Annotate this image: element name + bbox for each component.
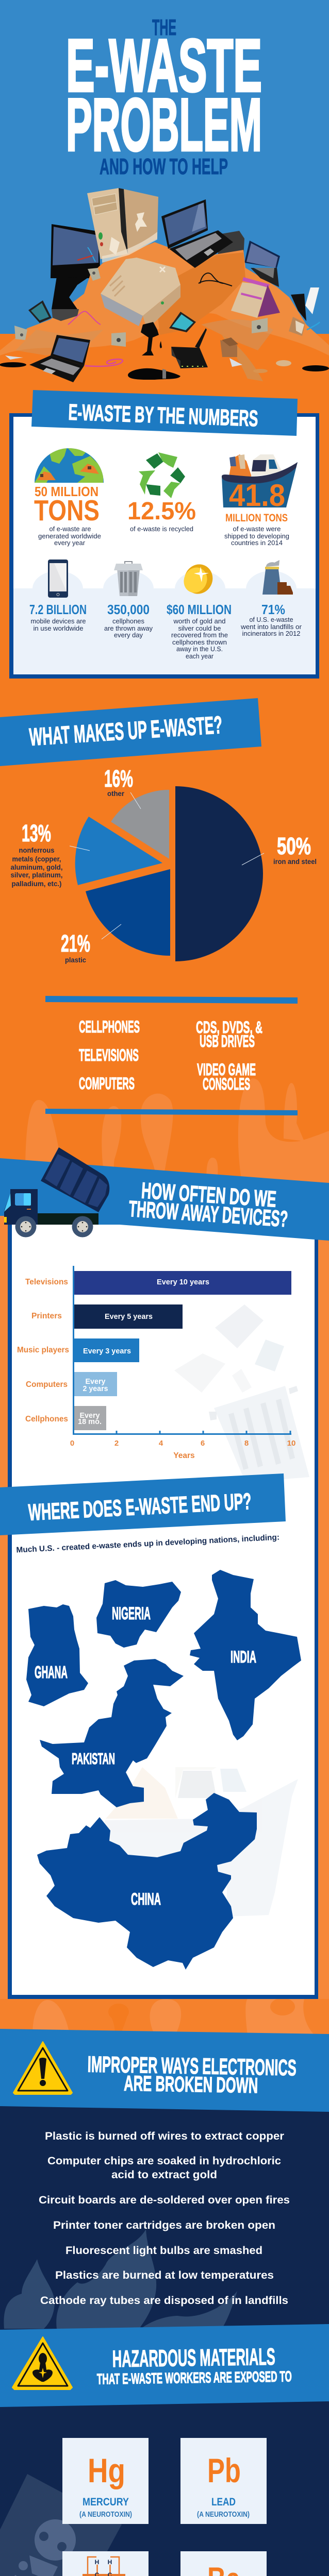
list: improper practices: Printer toner cartridges are broken open — [53, 2219, 275, 2231]
stat: 7.2 billion mobile devices: in use worldwide — [33, 624, 84, 632]
card: polyvinyl chloride — [62, 2551, 149, 2576]
card: mercury: (A NEUROTOXIN) — [79, 2510, 132, 2519]
axis labels — [70, 1439, 295, 1460]
map: china — [37, 1793, 257, 1970]
heading banner — [31, 390, 298, 436]
axis labels: 2 — [114, 1439, 119, 1448]
card: mercury: MERCURY — [83, 2496, 129, 2508]
list: improper practices: Circuit boards are de-soldered over open fires — [39, 2194, 290, 2206]
bar: computers: Computers — [26, 1380, 68, 1389]
title: AND HOW TO HELP — [100, 154, 228, 179]
map: ghana: GHANA — [35, 1663, 68, 1682]
stat: 350,000 cellphones: 350,000 — [107, 602, 150, 617]
label: nonferrous metals: aluminum, gold, — [10, 863, 63, 871]
axis labels: 0 — [70, 1439, 74, 1448]
bar: computers: Every — [86, 1377, 106, 1386]
icon: health hazard triangle — [12, 2337, 72, 2389]
label: nonferrous metals: silver, platinum, — [10, 871, 63, 879]
label: iron and steel: iron and steel — [273, 857, 317, 866]
stat: 41.8 million tons: of e-waste were — [233, 525, 281, 533]
stat: 350,000 cellphones — [104, 562, 153, 639]
label: plastic — [61, 930, 90, 964]
map: nigeria: NIGERIA — [112, 1604, 151, 1623]
heading: what makes up e-waste — [0, 698, 261, 766]
card: lead — [180, 2438, 267, 2524]
list: types of e-waste devices: CONSOLES — [203, 1075, 250, 1093]
list: types of e-waste devices: TELEVISIONS — [79, 1046, 139, 1064]
list: types of e-waste devices: VIDEO GAME — [197, 1060, 256, 1079]
bar: cellphones — [25, 1406, 106, 1430]
stat: 7.2 billion mobile devices: mobile devices are — [31, 617, 86, 625]
watermark: discarded devices — [174, 1304, 309, 1482]
stat: 12.5% recycled — [127, 452, 196, 533]
panel: hazardous materials — [0, 2324, 329, 2576]
bar: computers — [26, 1372, 117, 1396]
label: plastic: plastic — [65, 956, 86, 964]
subtitle: Much U.S. - created e-waste ends up in developing nations, including: — [16, 1533, 279, 1554]
stat: 350,000 cellphones: every day — [114, 631, 143, 639]
label: iron and steel — [273, 833, 317, 866]
card: lead: LEAD — [211, 2496, 236, 2508]
stat: 50 million tons: 50 MILLION — [35, 484, 98, 499]
list: improper practices — [39, 2130, 290, 2307]
list: types of e-waste devices: CDS, DVDS, & — [196, 1018, 262, 1037]
panel: device lifespan and destinations — [8, 1216, 318, 1999]
list: types of e-waste devices: COMPUTERS — [79, 1074, 135, 1093]
title: THE — [152, 15, 176, 40]
label: other: other — [107, 789, 125, 798]
stat: 350,000 cellphones: cellphones — [112, 617, 144, 625]
stat: 41.8 million tons: shipped to developing — [224, 532, 289, 540]
axis labels: 8 — [244, 1439, 249, 1448]
stat: 350,000 cellphones: are thrown away — [104, 624, 153, 632]
map: china: CHINA — [131, 1890, 161, 1908]
label: nonferrous metals: nonferrous — [19, 846, 55, 854]
card: polyvinyl chloride: H — [95, 2558, 99, 2566]
axis labels: 4 — [159, 1439, 163, 1448]
stat: $60 million of gold and silver: recovered from the — [171, 631, 228, 639]
label: nonferrous metals: palladium, etc.) — [11, 880, 62, 888]
list: improper practices: Cathode ray tubes are disposed of in landfills — [40, 2295, 288, 2307]
list: improper practices: Plastics are burned at low temperatures — [55, 2269, 274, 2281]
map: india: INDIA — [231, 1648, 256, 1666]
banner: how often do we throw away devices — [0, 1158, 329, 1241]
label: nonferrous metals: metals (copper, — [12, 855, 61, 863]
label: nonferrous metals: 13% — [22, 820, 51, 846]
stat: 12.5% recycled: of e-waste is recycled — [130, 525, 193, 533]
bar: music players — [17, 1338, 139, 1362]
icon: dump truck — [4, 1147, 109, 1238]
slice: iron and steel 50% — [175, 786, 263, 961]
stat: 41.8 million tons: countries in 2014 — [231, 539, 283, 547]
label: plastic: 21% — [61, 930, 90, 957]
bar: printers: Every 5 years — [105, 1312, 153, 1321]
bar: computers: 2 years — [83, 1384, 108, 1393]
stat: 50 million tons: of e-waste are — [50, 525, 91, 533]
list: improper practices: acid to extract gold — [111, 2169, 217, 2181]
card: mercury — [62, 2438, 149, 2524]
slice: plastic 21% — [86, 869, 170, 956]
banner: hazardous materials — [0, 2324, 329, 2407]
panel: e-waste by the numbers — [9, 390, 319, 679]
banner: improper ways — [0, 2029, 329, 2112]
label: iron and steel: 50% — [277, 833, 311, 859]
label: other — [104, 765, 133, 798]
card: lead: Pb — [207, 2451, 241, 2489]
stat: 50 million tons: TONS — [34, 494, 100, 527]
list: improper practices: Fluorescent light bulbs are smashed — [65, 2245, 262, 2257]
slice: other 16% — [111, 790, 169, 859]
map: india — [190, 1570, 301, 1740]
card: polyvinyl chloride: H — [108, 2558, 112, 2566]
stat: 50 million tons: generated worldwide — [38, 532, 101, 540]
heading: where does e-waste end up — [0, 1473, 286, 1535]
bar: music players: Every 3 years — [83, 1347, 131, 1355]
stat: $60 million of gold and silver: silver could be — [178, 624, 221, 632]
bar: televisions — [25, 1271, 291, 1295]
stat: 41.8 million tons — [222, 454, 298, 547]
bar: cellphones: Every — [79, 1411, 100, 1420]
stat: 50 million tons: every year — [54, 539, 86, 547]
decoration: flames — [4, 2229, 237, 2329]
stat: 71% landfills or incinerators: of U.S. e-waste — [250, 616, 293, 623]
list: improper practices: Plastic is burned off wires to extract copper — [45, 2130, 284, 2142]
stat: $60 million of gold and silver: away in the U.S. — [176, 645, 223, 653]
card: mercury: Hg — [88, 2451, 125, 2489]
decoration: poison flag 1 — [0, 2474, 122, 2576]
stat: 12.5% recycled: 12.5% — [127, 498, 196, 525]
bar: printers — [31, 1304, 183, 1329]
stat: 71% landfills or incinerators — [240, 560, 302, 637]
stat: 7.2 billion mobile devices — [29, 560, 87, 632]
axis labels: 6 — [201, 1439, 205, 1448]
stat: 41.8 million tons: MILLION TONS — [225, 512, 288, 524]
list: types of e-waste devices — [79, 1018, 262, 1093]
bar: televisions: Every 10 years — [157, 1278, 209, 1286]
label: nonferrous metals — [10, 820, 63, 888]
stat: 50 million tons — [34, 447, 104, 547]
slice: nonferrous metals 13% — [75, 817, 162, 885]
illustration: e-waste pile — [0, 188, 329, 402]
list: types of e-waste devices: CELLPHONES — [79, 1018, 140, 1036]
stat: $60 million of gold and silver: each year — [186, 652, 214, 660]
card: lead: (A NEUROTOXIN) — [197, 2510, 250, 2519]
axis labels: 10 — [287, 1439, 295, 1448]
stat: 7.2 billion mobile devices: 7.2 BILLION — [29, 602, 87, 617]
map: pakistan — [40, 1659, 184, 1807]
stat: $60 million of gold and silver: $60 MILLION — [167, 602, 232, 617]
list: types of e-waste devices: USB DRIVES — [200, 1032, 255, 1050]
bar: printers: Printers — [31, 1312, 62, 1320]
label: other: 16% — [104, 765, 133, 792]
list: improper practices: Computer chips are soaked in hydrochloric — [47, 2155, 281, 2167]
stat: 71% landfills or incinerators: went into landfills or — [240, 623, 302, 631]
map: nigeria — [96, 1580, 181, 1648]
stat: 71% landfills or incinerators: 71% — [261, 602, 285, 617]
card: barium — [180, 2551, 267, 2576]
bar: music players: Music players — [17, 1346, 69, 1354]
bar: televisions: Televisions — [25, 1278, 68, 1286]
stat: 41.8 million tons: 41.8 — [229, 478, 285, 513]
stat: 71% landfills or incinerators: incinerators in 2012 — [242, 630, 300, 637]
axis labels: Years — [173, 1451, 195, 1460]
panel: improper ways electronics are broken down — [0, 2029, 329, 2336]
map: pakistan: PAKISTAN — [72, 1750, 115, 1768]
stat: $60 million of gold and silver — [167, 560, 232, 660]
bar: cellphones: 18 mo. — [78, 1417, 102, 1426]
map: ghana — [26, 1604, 88, 1706]
bar chart: how often devices are thrown away — [17, 1266, 295, 1460]
icon: warning triangle — [13, 2042, 72, 2094]
pie chart: composition of e-waste — [10, 765, 317, 964]
title — [66, 15, 262, 179]
stat: $60 million of gold and silver: cellphones thrown — [172, 638, 227, 646]
stat: $60 million of gold and silver: worth of gold and — [173, 617, 226, 625]
watermark: cargo boat — [105, 1767, 298, 1917]
bar: cellphones: Cellphones — [25, 1415, 68, 1423]
